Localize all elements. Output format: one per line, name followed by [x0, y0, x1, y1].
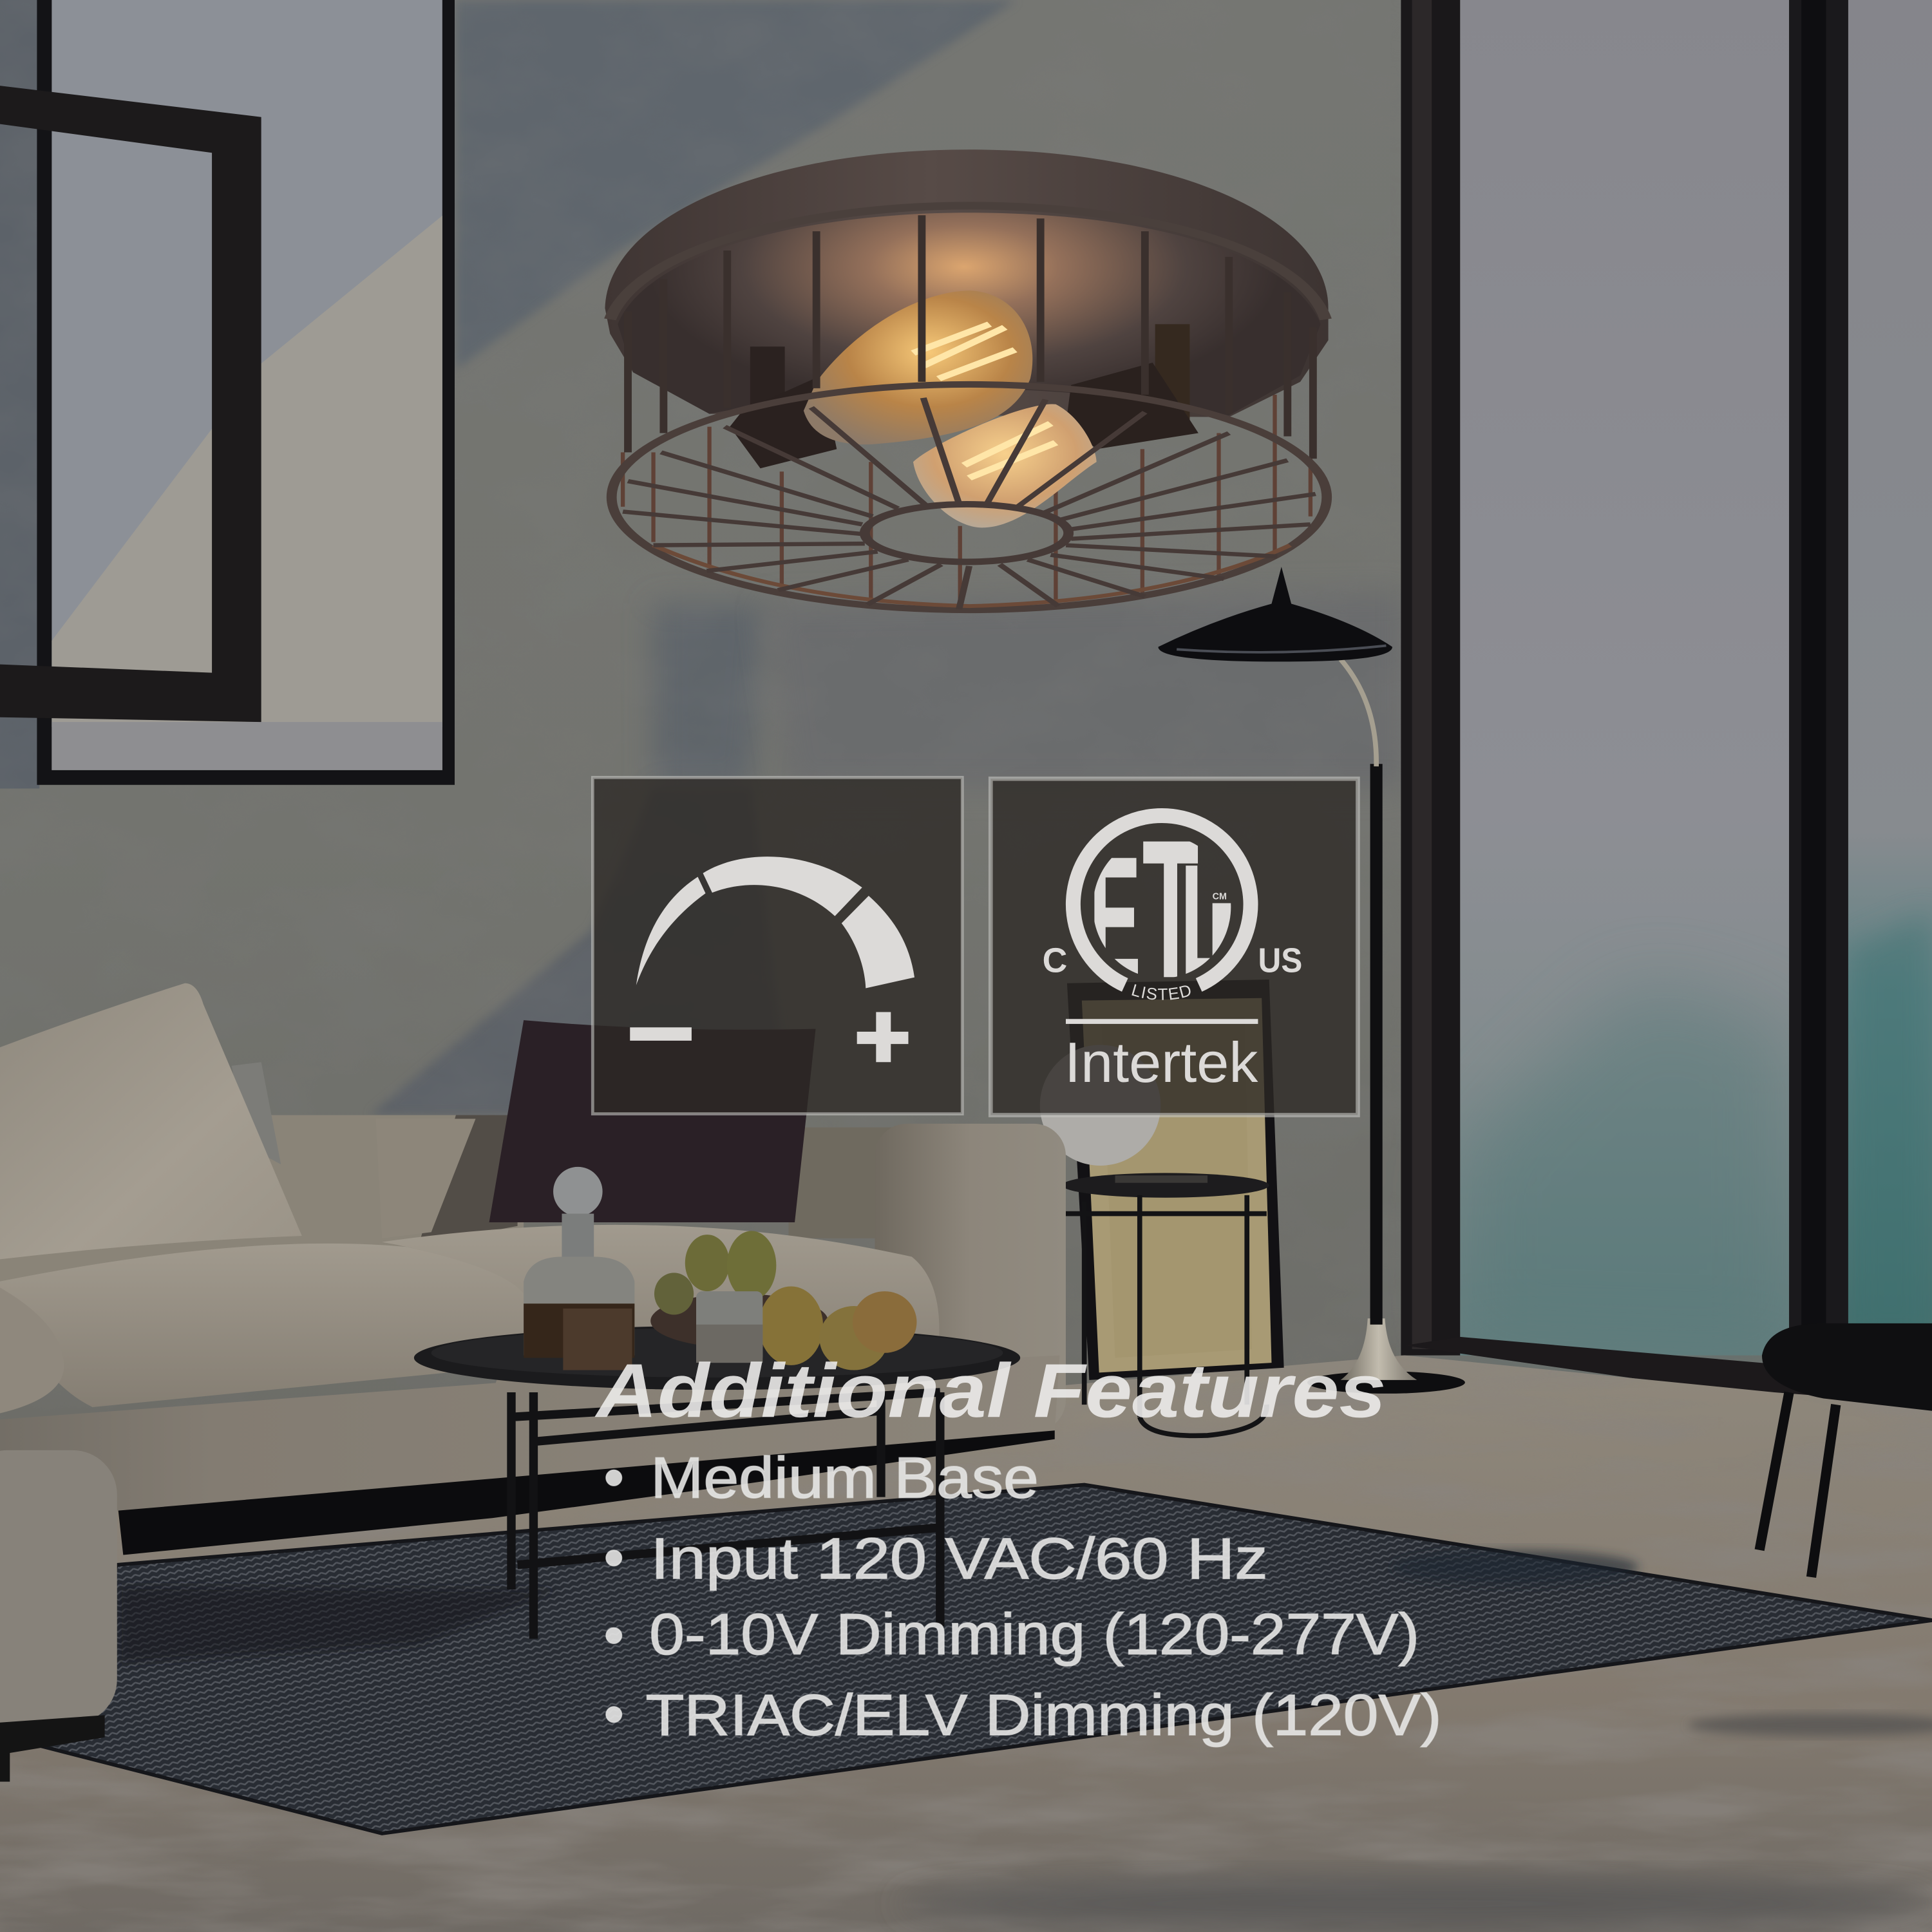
US label: US — [1258, 942, 1302, 980]
plate lip — [610, 205, 1326, 319]
canvas leaning on wall — [1067, 980, 1284, 1380]
feature: medium base: Medium Base — [650, 1446, 1039, 1511]
ETL logo — [1043, 808, 1302, 1019]
icon: plus sign — [857, 1012, 908, 1062]
panel background — [592, 777, 962, 1114]
lower bulb — [913, 404, 1097, 527]
feature: TRIAC/ELV dimming: TRIAC/ELV Dimming (120V) — [646, 1683, 1442, 1748]
feature: input voltage: • — [603, 1526, 624, 1590]
feature: medium base: • — [603, 1446, 624, 1510]
cage back bars below the interior — [623, 395, 1311, 609]
poster on wall — [37, 0, 455, 785]
feature: 0-10V dimming: 0-10V Dimming (120-277V) — [649, 1603, 1419, 1667]
sockets — [730, 324, 1198, 468]
concrete wall — [0, 0, 1002, 1115]
bottom ring — [612, 384, 1327, 610]
window frames and glass — [1401, 0, 1932, 1411]
ETL logo: CM — [1213, 892, 1227, 902]
Intertek wordmark: Intertek — [1065, 1030, 1258, 1094]
C label: C — [1043, 942, 1067, 980]
ETL letters: L — [1180, 831, 1229, 1010]
metal plate — [605, 149, 1329, 417]
white globe lamp — [1040, 1045, 1160, 1166]
coffee table — [414, 1326, 1020, 1639]
polished concrete floor — [0, 1343, 1932, 1932]
ETL letters — [1094, 841, 1231, 978]
logo ring — [1073, 815, 1251, 985]
spokes — [623, 398, 1316, 609]
feature list — [603, 1446, 1442, 1748]
icon: dimmer gauge — [636, 857, 914, 988]
feature: 0-10V dimming: • — [603, 1604, 624, 1668]
panel: dimming — [592, 777, 962, 1114]
rule under logo — [1066, 1019, 1258, 1024]
heading: Additional Features: Additional Features — [594, 1349, 1386, 1434]
panel background — [990, 779, 1358, 1115]
upper cage bars — [628, 215, 1313, 459]
sofa — [0, 983, 1066, 1782]
woven rug — [31, 1484, 1932, 1833]
upper bulb — [804, 290, 1032, 444]
beige pillow — [0, 983, 302, 1259]
filaments — [913, 324, 1056, 478]
lit plate interior — [618, 213, 1321, 415]
bowl of pears — [650, 1231, 916, 1370]
ETL letters: E — [1089, 820, 1141, 1016]
floor lamp — [1158, 567, 1465, 1394]
copper inner ring edge — [654, 545, 1290, 606]
feature: input voltage: Input 120 VAC/60 Hz — [650, 1527, 1268, 1591]
center ring — [865, 504, 1068, 562]
wooden picture frame — [0, 85, 261, 722]
side table — [1062, 1173, 1269, 1435]
ETL letters: T — [1142, 799, 1199, 1019]
dark purple cushion — [489, 1020, 816, 1222]
icon: minus sign — [630, 1027, 692, 1041]
stool — [1759, 1323, 1932, 1577]
ceiling light fixture — [605, 149, 1329, 610]
glass decanter — [524, 1167, 634, 1370]
listed label: LISTED — [1132, 984, 1191, 1000]
feature: TRIAC/ELV dimming: • — [603, 1682, 624, 1747]
panel: ETL certification — [989, 777, 1360, 1117]
